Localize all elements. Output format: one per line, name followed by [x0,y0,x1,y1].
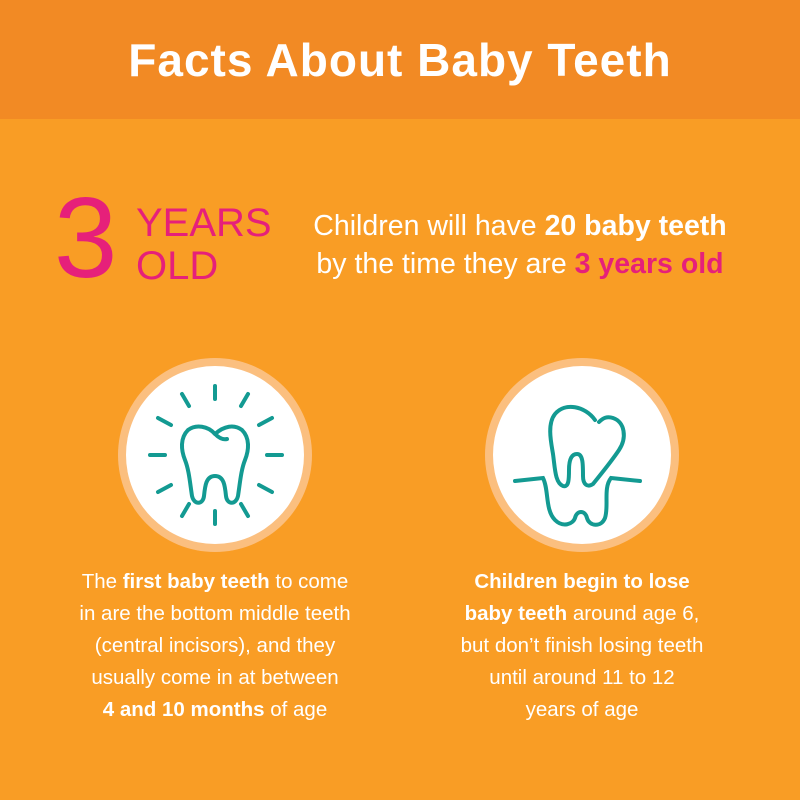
text: losing teeth: but don’t finish losing teeth [461,634,703,657]
icon: shining tooth [118,358,312,552]
header bar [0,0,800,119]
big number 3 years old: YEARS [136,201,272,245]
fact text: 20 teeth: Children will have 20 baby teeth [313,210,727,242]
fact text: 20 teeth: by the time they are 3 years old [316,248,724,280]
fact text: 20 teeth [313,210,727,280]
text: losing teeth [461,570,703,721]
big number 3 years old: OLD [136,244,218,288]
text: losing teeth: Children begin to lose [474,570,690,593]
text: first baby teeth: usually come in at between [91,666,339,689]
text: losing teeth: years of age [526,698,638,721]
text: losing teeth: baby teeth around age 6, [465,602,699,625]
text: first baby teeth: in are the bottom middle teeth [79,602,351,625]
big number 3 years old [54,175,272,302]
text: first baby teeth [79,570,351,721]
icon: losing tooth [485,358,679,552]
title: Facts About Baby Teeth [128,34,672,86]
text: losing teeth: until around 11 to 12 [489,666,675,689]
text: first baby teeth: The first baby teeth to come [82,570,348,593]
text: first baby teeth: (central incisors), and they [95,634,335,657]
text: first baby teeth: 4 and 10 months of age [103,698,327,721]
big number 3 years old: 3 [54,175,117,302]
